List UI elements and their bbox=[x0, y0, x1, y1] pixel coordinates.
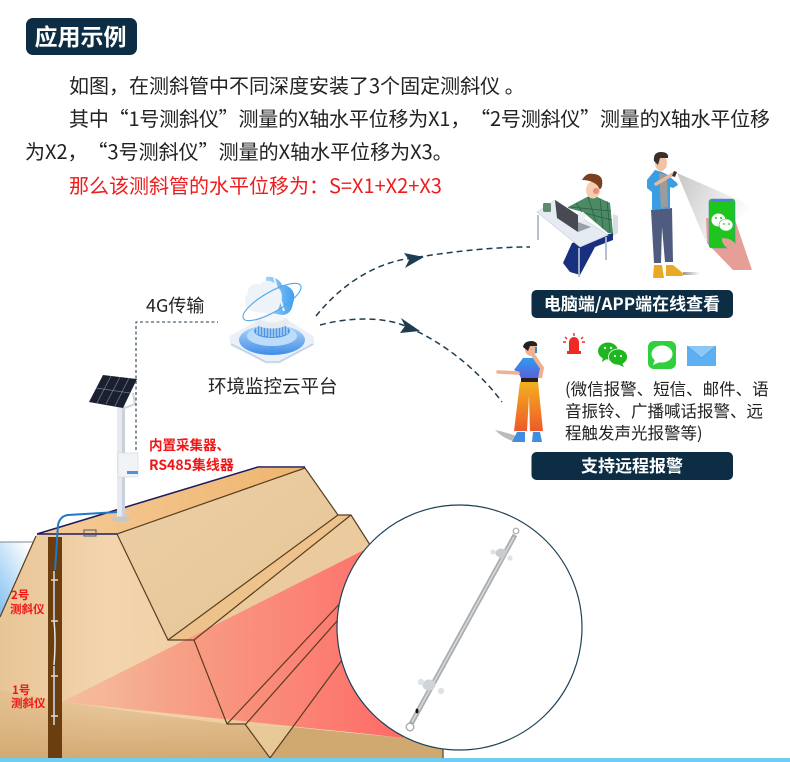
button: computer and APP viewing: 电脑端/APP端在线查看 bbox=[544, 290, 720, 315]
inclinometer rod bbox=[411, 535, 515, 724]
blue inner panel bbox=[239, 325, 305, 355]
inclinometer borehole bbox=[48, 537, 62, 758]
dashed arrow to computer and app viewers bbox=[316, 247, 530, 316]
description text block bbox=[25, 70, 770, 199]
cloud front bbox=[245, 281, 282, 314]
grille column bbox=[254, 324, 290, 338]
ground strip bbox=[270, 727, 443, 758]
label: built-in collector bbox=[149, 434, 234, 475]
depth labels: 1号 bbox=[12, 682, 30, 698]
hand holding phone bbox=[706, 218, 752, 270]
icon: SMS message bbox=[648, 341, 676, 369]
label: built-in collector: RS485集线器 bbox=[149, 455, 234, 475]
description text block: 其中“1号测斜仪”测量的X轴水平位移为X1，“2号测斜仪”测量的X轴水平位移 bbox=[69, 103, 770, 132]
solar panel bbox=[89, 375, 137, 408]
head bbox=[525, 342, 537, 356]
shirt bbox=[647, 170, 678, 210]
head bbox=[655, 155, 667, 171]
shirt bbox=[568, 195, 613, 233]
trousers bbox=[563, 233, 613, 275]
description text block: 那么该测斜管的水平位移为：S=X1+X2+X3 bbox=[69, 170, 442, 199]
shoes bbox=[653, 265, 664, 278]
shoes bbox=[512, 432, 525, 442]
WeChat bubbles on phone bbox=[712, 214, 726, 226]
thumb bbox=[722, 238, 738, 256]
trousers bbox=[514, 382, 543, 431]
magnified inclinometer circle bbox=[337, 505, 582, 750]
4G dashed link bbox=[136, 322, 218, 450]
table bbox=[537, 200, 608, 247]
ground shadow bbox=[683, 272, 700, 275]
red displacement wedge bbox=[62, 546, 404, 738]
pole bbox=[117, 406, 125, 518]
description text block: 为X2，“3号测斜仪”测量的X轴水平位移为X3。 bbox=[25, 136, 453, 165]
lower slope bbox=[194, 515, 404, 737]
description text block: 如图，在测斜管中不同深度安装了3个固定测斜仪 。 bbox=[69, 70, 525, 99]
solar monitoring station bbox=[89, 375, 138, 522]
head bbox=[586, 182, 600, 198]
arms bbox=[498, 372, 518, 373]
trousers bbox=[651, 208, 673, 263]
label: 4G传输: 4G传输 bbox=[146, 292, 204, 318]
shirt bbox=[514, 358, 543, 378]
orbit ring bbox=[238, 277, 306, 327]
water on the left of the embankment bbox=[0, 542, 33, 617]
mug bbox=[543, 203, 551, 212]
icon: WeChat bbox=[598, 342, 628, 367]
chair bbox=[613, 214, 618, 236]
crest edge bbox=[37, 467, 305, 534]
alarm methods text: (微信报警、短信、邮件、语 bbox=[565, 376, 769, 400]
alarm methods text: 音振铃、广播喊话报警、远 bbox=[565, 398, 763, 422]
embankment cross-section diagram bbox=[0, 467, 443, 758]
illustration: person at computer bbox=[537, 174, 618, 277]
cloud back bbox=[266, 277, 294, 315]
heading badge: 应用示例: 应用示例 bbox=[34, 18, 126, 52]
illustration: person on the phone bbox=[495, 341, 543, 442]
toe block bbox=[245, 725, 293, 758]
signal cable bbox=[55, 512, 118, 570]
depth labels: 测斜仪 bbox=[10, 601, 45, 617]
depth labels bbox=[10, 587, 46, 711]
bottom light-blue strip bbox=[0, 758, 790, 762]
dashed arrow to remote alarm bbox=[320, 318, 502, 402]
icon: red alarm siren bbox=[563, 333, 585, 354]
inclinometers in the borehole bbox=[51, 571, 58, 725]
base plate bbox=[231, 320, 313, 362]
illustration: person viewing phone bbox=[647, 152, 755, 278]
label: cloud platform: 环境监控云平台 bbox=[208, 373, 338, 399]
depth labels: 2号 bbox=[11, 587, 29, 603]
alarm methods text: 程触发声光报警等) bbox=[565, 420, 703, 444]
forearm and phone bbox=[656, 174, 673, 184]
berm bbox=[168, 515, 351, 640]
projection beam bbox=[677, 173, 755, 240]
icon: email envelope bbox=[687, 346, 716, 366]
ground shadow bbox=[495, 430, 517, 442]
embankment top surface bbox=[37, 468, 305, 534]
embankment front face bbox=[0, 534, 270, 758]
depth labels: 测斜仪 bbox=[11, 695, 46, 711]
upper slope bbox=[117, 468, 338, 640]
phone bbox=[709, 199, 735, 248]
collector box bbox=[118, 453, 138, 477]
lower bank shading below the wedge bbox=[0, 690, 270, 758]
slope outlines bbox=[0, 468, 372, 758]
alarm methods text bbox=[565, 376, 769, 444]
button: remote alarm: 支持远程报警 bbox=[581, 452, 683, 477]
label: built-in collector: 内置采集器、 bbox=[149, 434, 230, 454]
button: remote alarm bbox=[532, 452, 733, 480]
laptop bbox=[555, 200, 578, 232]
icon: cloud platform bbox=[231, 277, 313, 362]
